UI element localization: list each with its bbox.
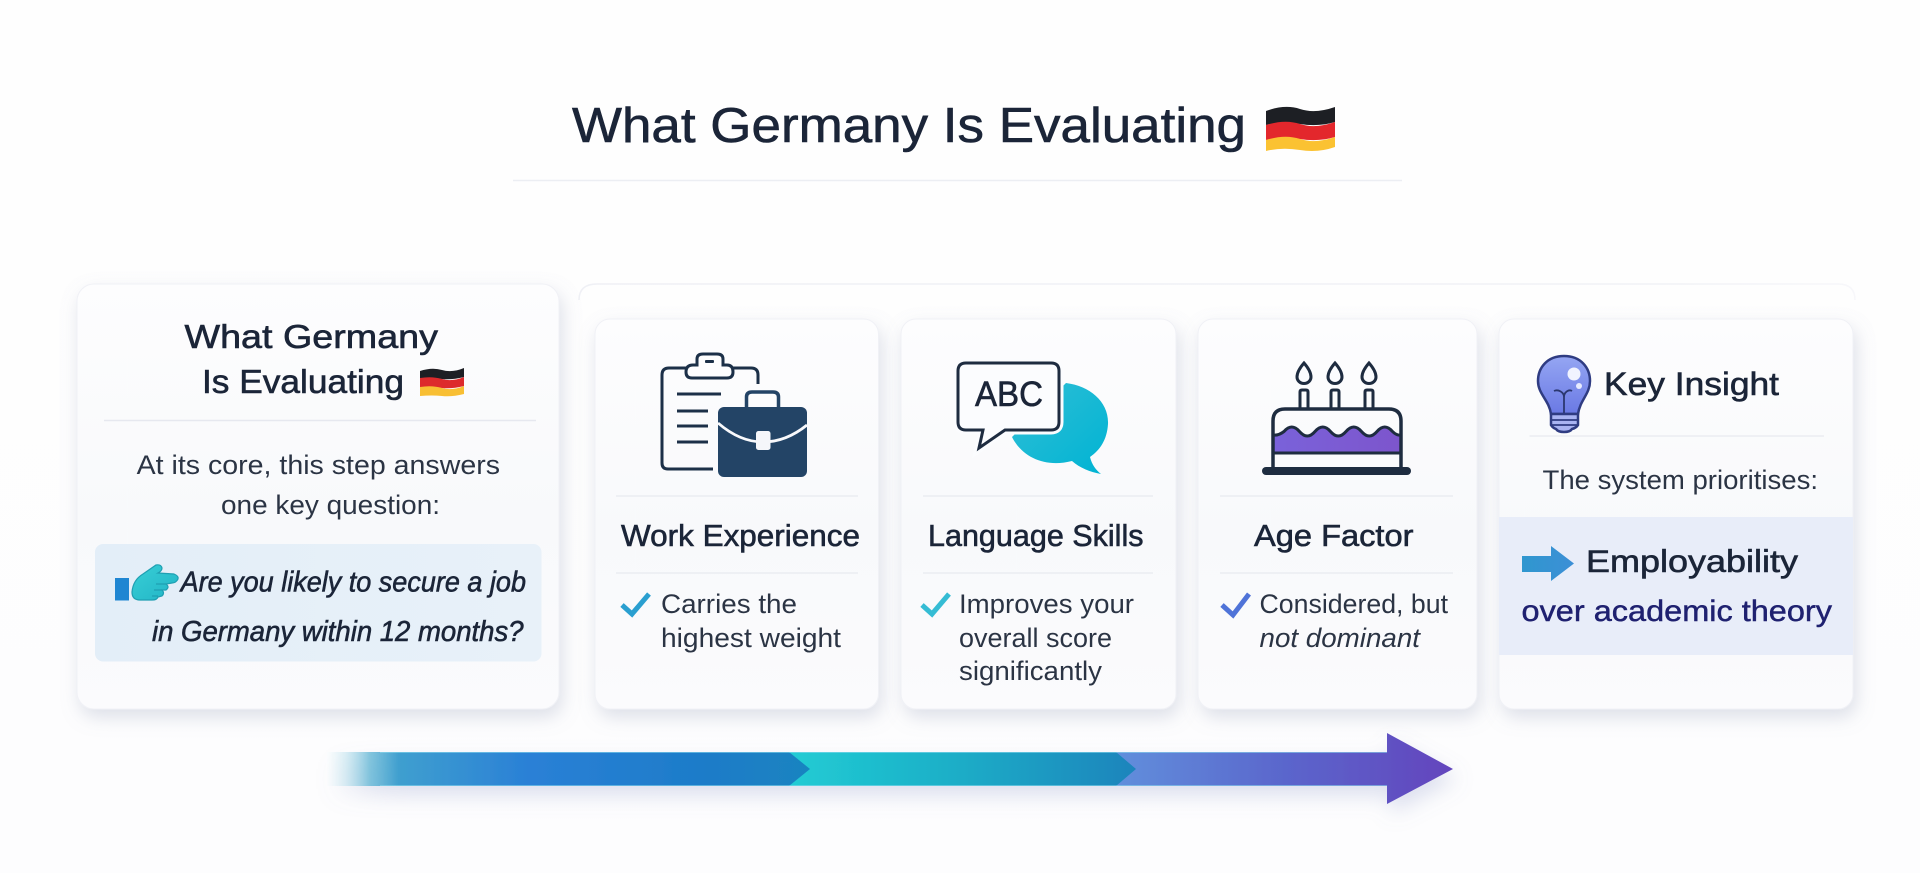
panel: intro card [77, 284, 559, 709]
heading: card title [184, 319, 438, 401]
text: intro question lead: At its core, this step answers [137, 450, 500, 480]
callout: employability: over academic theory [1522, 595, 1832, 628]
text: language skills note: Improves your [959, 589, 1134, 619]
heading: card title: Is Evaluating [202, 364, 404, 401]
icon: speech bubbles: ABC [975, 375, 1043, 414]
panel: key insight [1499, 319, 1853, 709]
callout: key question [95, 544, 542, 662]
icon: clipboard and briefcase [662, 354, 807, 477]
callout: key question: in Germany within 12 months? [152, 616, 524, 648]
callout: key question: Are you likely to secure a job [179, 567, 526, 599]
title: What Germany Is Evaluating [572, 99, 1246, 153]
heading: language skills: Language Skills [928, 519, 1144, 553]
icon: check [1222, 594, 1249, 615]
callout: employability: Employability [1586, 543, 1798, 579]
text: age factor note: not dominant [1260, 623, 1422, 653]
panel: age factor [1198, 319, 1477, 709]
text: language skills note: significantly [959, 656, 1103, 686]
icon: blue arrow [1522, 546, 1574, 581]
panel: work experience [595, 319, 878, 709]
text: language skills note: overall score [959, 623, 1112, 653]
icon: check [622, 594, 649, 614]
icon: light bulb [1538, 356, 1590, 432]
icon: check [922, 594, 949, 614]
icon: birthday cake [1262, 363, 1411, 475]
icon: German flag in title [1266, 107, 1335, 151]
text: age factor note [1260, 589, 1449, 653]
text: work experience note: Carries the [661, 589, 797, 619]
text: intro question lead [137, 450, 500, 520]
callout: employability [1499, 517, 1853, 655]
text: work experience note [661, 589, 842, 653]
panel: outer container behind cards [579, 284, 1855, 300]
text: language skills note [959, 589, 1134, 686]
arrow: progress arrow [326, 733, 1453, 804]
icon: pointing hand [115, 565, 178, 600]
text: work experience note: highest weight [661, 623, 842, 653]
heading: card title: What Germany [184, 319, 438, 356]
panel: language skills [901, 319, 1176, 709]
text: age factor note: Considered, but [1260, 589, 1449, 619]
heading: work experience: Work Experience [621, 519, 860, 553]
text: system prioritises: The system prioritises: [1542, 465, 1818, 495]
heading: age factor: Age Factor [1254, 519, 1414, 553]
text: intro question lead: one key question: [221, 490, 440, 520]
icon: German flag [420, 368, 464, 396]
heading: key insight: Key Insight [1604, 366, 1779, 402]
icon: speech bubbles [958, 363, 1108, 474]
